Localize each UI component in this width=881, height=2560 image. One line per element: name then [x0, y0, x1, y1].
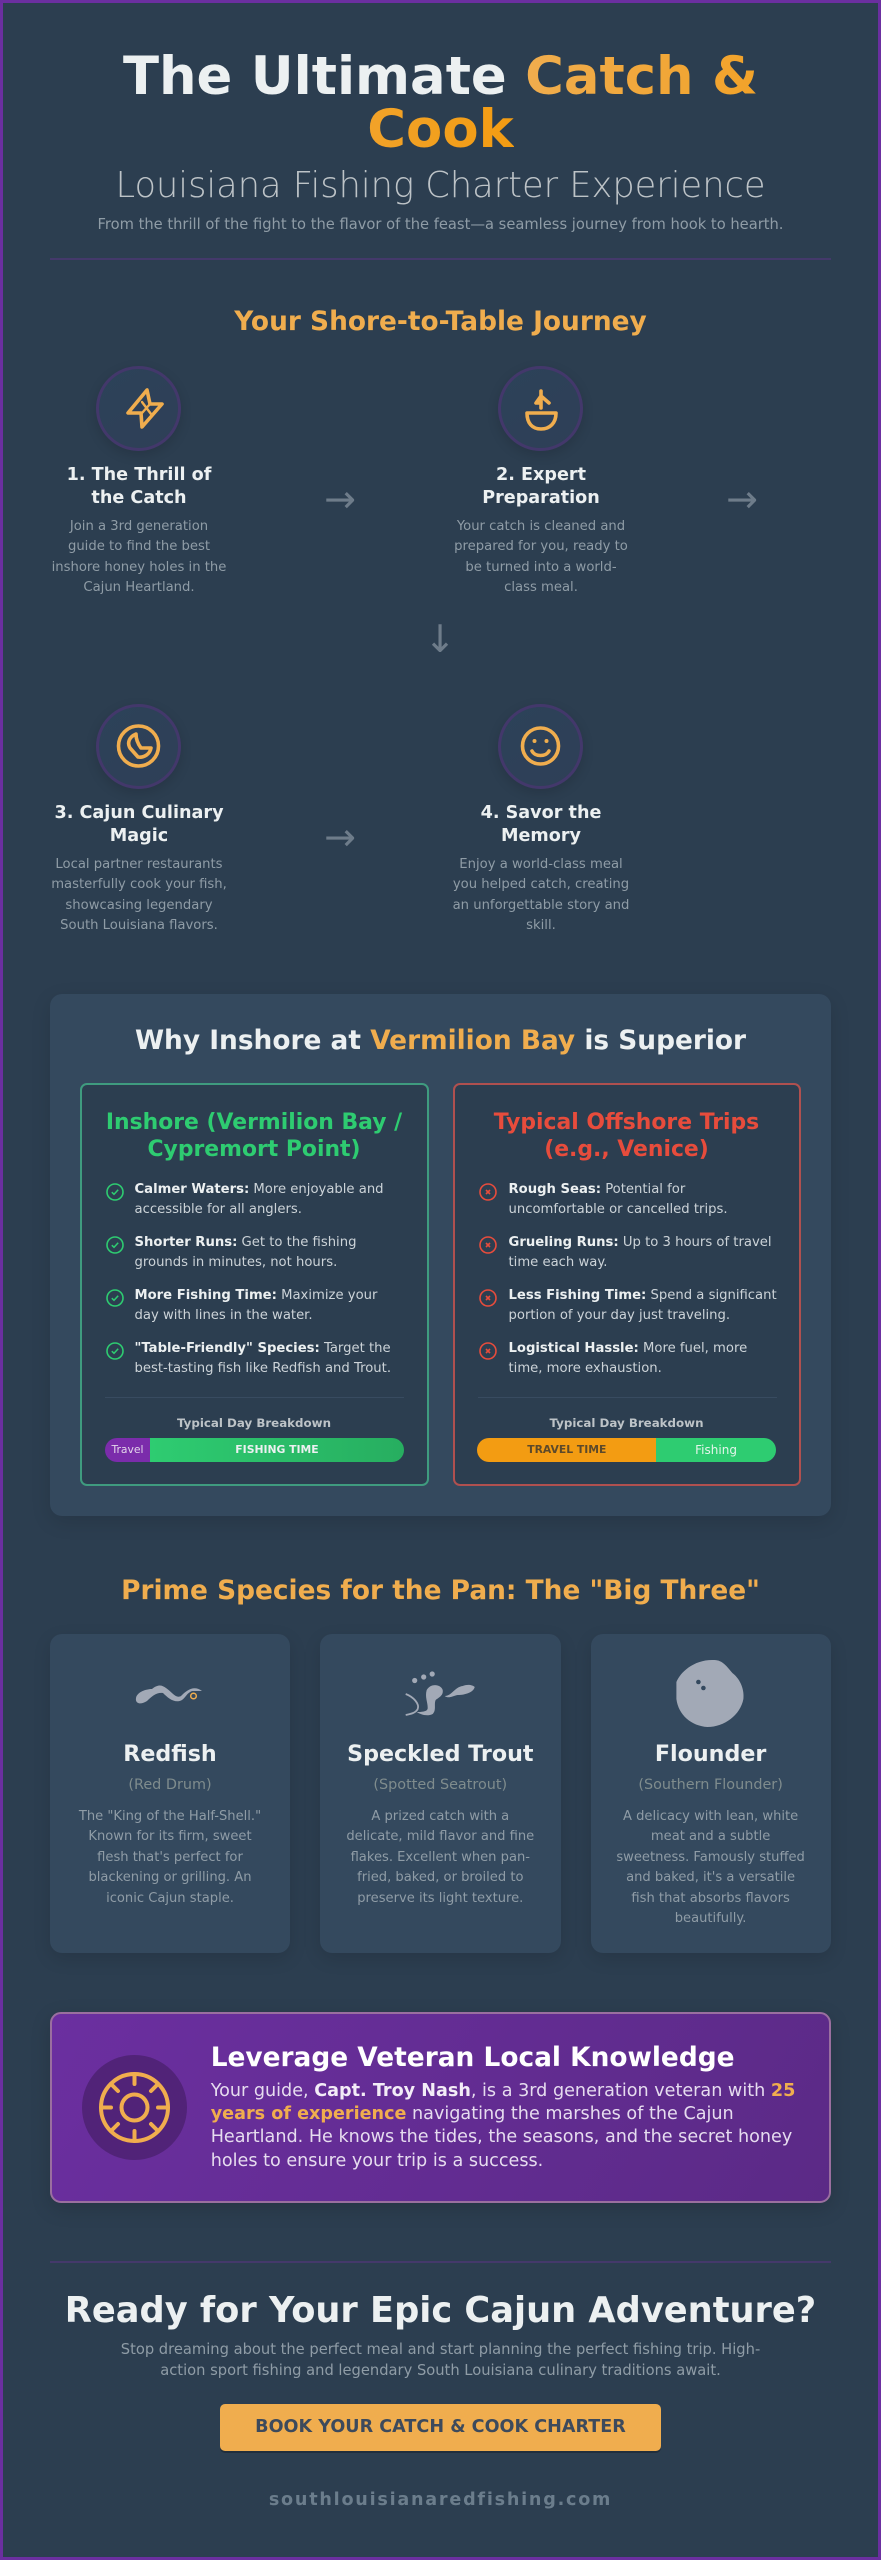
- cta text: [0, 2340, 881, 2381]
- website: southlouisianaredfishing.com: [269, 2490, 612, 2510]
- step title: Preparation: [482, 488, 600, 508]
- item: Shorter Runs: Get to the fishing: [134, 1235, 356, 1250]
- step title: Memory: [501, 826, 581, 846]
- item: [134, 1341, 391, 1376]
- offshore title: (e.g., Venice): [544, 1137, 709, 1162]
- species text: [591, 1807, 831, 1929]
- step title: [54, 803, 224, 846]
- step text: class meal.: [504, 580, 578, 595]
- bar: offshore day: [477, 1438, 776, 1462]
- callout: local knowledge: [50, 2012, 831, 2203]
- callout text: Heartland. He knows the tides, the seasons, and the secret honey: [211, 2127, 792, 2147]
- icon: plate: [96, 704, 181, 789]
- species text: [320, 1807, 560, 1909]
- cta heading: Ready for Your Epic Cajun Adventure?: [65, 2290, 816, 2331]
- step text: Local partner restaurants: [55, 857, 223, 872]
- step text: [52, 519, 226, 595]
- step 3: [51, 704, 227, 933]
- header: [98, 46, 783, 232]
- panel: inshore: [80, 1083, 428, 1486]
- icon: lightning bolt: [96, 366, 181, 451]
- panel: offshore: [452, 1083, 800, 1486]
- offshore title: Typical Offshore Trips: [494, 1110, 759, 1135]
- species text: A delicacy with lean, white: [623, 1809, 798, 1824]
- item: [134, 1288, 378, 1323]
- callout text: Your guide, Capt. Troy Nash, is a 3rd generation veteran with 25: [211, 2080, 795, 2100]
- travel segment: Travel: [111, 1443, 144, 1456]
- item: day with lines in the water.: [134, 1308, 313, 1323]
- step text: Enjoy a world-class meal: [459, 857, 623, 872]
- item: time, more exhaustion.: [508, 1361, 662, 1376]
- item: [134, 1182, 384, 1217]
- step text: South Louisiana flavors.: [60, 918, 218, 933]
- step title: [482, 465, 600, 508]
- arrow down: ↓: [424, 617, 456, 661]
- icon: smile: [498, 704, 583, 789]
- item: [508, 1341, 747, 1376]
- species text: blackening or grilling. An: [88, 1870, 252, 1885]
- species text: flesh that's perfect for: [97, 1850, 243, 1865]
- item: Calmer Waters: More enjoyable and: [134, 1182, 384, 1197]
- step text: inshore honey holes in the: [52, 560, 226, 575]
- call to action: [0, 2280, 881, 2520]
- icon: check: [106, 1289, 124, 1307]
- item: Rough Seas: Potential for: [508, 1182, 685, 1197]
- species alt name: (Red Drum): [128, 1777, 212, 1793]
- step text: Join a 3rd generation: [70, 519, 208, 534]
- travel segment: [477, 1438, 656, 1462]
- title: The Ultimate Catch &: [123, 46, 758, 107]
- item: "Table-Friendly" Species: Target the: [134, 1341, 391, 1356]
- species name: Speckled Trout: [347, 1741, 533, 1767]
- step title: 4. Savor the: [481, 803, 601, 823]
- step text: Cajun Heartland.: [83, 580, 195, 595]
- icon: cross: [479, 1342, 497, 1360]
- step title: [67, 465, 212, 508]
- step text: showcasing legendary: [65, 898, 213, 913]
- icon: flounder: [591, 1634, 831, 1734]
- item: accessible for all anglers.: [134, 1202, 302, 1217]
- species text: preserve its light texture.: [357, 1891, 523, 1906]
- callout text: holes to ensure your trip is a success.: [211, 2151, 543, 2171]
- item: portion of your day just traveling.: [508, 1308, 730, 1323]
- title: Cook: [367, 99, 514, 160]
- icon: cross: [479, 1289, 497, 1307]
- species alt name: (Spotted Seatrout): [373, 1777, 507, 1793]
- item: grounds in minutes, not hours.: [134, 1255, 337, 1270]
- breakdown label: Typical Day Breakdown: [177, 1416, 331, 1430]
- inshore title: Cypremort Point): [147, 1137, 361, 1162]
- card: trout: [320, 1634, 561, 1953]
- icon: bowl: [498, 366, 583, 451]
- fishing segment: [656, 1438, 776, 1462]
- step text: Your catch is cleaned and: [457, 519, 625, 534]
- step 2: [454, 366, 628, 595]
- item: uncomfortable or cancelled trips.: [508, 1202, 728, 1217]
- card: flounder: [591, 1634, 831, 1953]
- icon: redfish: [136, 1686, 202, 1704]
- species text: meat and a subtle: [651, 1829, 770, 1844]
- heading: why inshore: Why Inshore at Vermilion Bay is Superior: [135, 1025, 746, 1056]
- species text: fish that absorbs flavors: [631, 1891, 790, 1906]
- travel segment: [105, 1438, 150, 1462]
- step text: an unforgettable story and: [453, 898, 629, 913]
- species alt name: (Southern Flounder): [638, 1777, 783, 1793]
- arrow: →: [324, 815, 356, 859]
- bar: inshore day: [105, 1438, 404, 1462]
- arrow: →: [726, 477, 758, 521]
- step text: skill.: [526, 918, 556, 933]
- icon: cross: [479, 1183, 497, 1201]
- icon: check: [106, 1342, 124, 1360]
- step text: [453, 857, 629, 933]
- fishing segment: [150, 1438, 404, 1462]
- arrow: →: [324, 477, 356, 521]
- item: best-tasting fish like Redfish and Trout.: [134, 1361, 391, 1376]
- step text: be turned into a world-: [465, 560, 617, 575]
- icon: check: [106, 1183, 124, 1201]
- panel: comparison: [50, 994, 831, 1516]
- step text: [51, 857, 227, 933]
- step text: [454, 519, 628, 595]
- callout text: years of experience navigating the marshes of the Cajun: [211, 2104, 734, 2124]
- step title: 3. Cajun Culinary: [54, 803, 224, 823]
- drawback list: [479, 1182, 777, 1376]
- step title: 2. Expert: [496, 465, 586, 485]
- benefit list: [106, 1182, 391, 1376]
- step 1: [52, 366, 226, 595]
- species name: Flounder: [655, 1741, 766, 1767]
- cta text: action sport fishing and legendary South Louisiana culinary traditions await.: [160, 2362, 721, 2379]
- card: redfish: [50, 1634, 290, 1953]
- step text: you helped catch, creating: [453, 877, 629, 892]
- offshore title: [494, 1110, 759, 1162]
- species text: Known for its firm, sweet: [88, 1829, 252, 1844]
- item: [508, 1288, 777, 1323]
- travel segment: TRAVEL TIME: [527, 1443, 606, 1456]
- species text: sweetness. Famously stuffed: [616, 1850, 805, 1865]
- callout heading: Leverage Veteran Local Knowledge: [211, 2042, 735, 2073]
- icon: trout: [406, 1671, 475, 1716]
- item: [508, 1182, 728, 1217]
- item: [134, 1235, 356, 1270]
- icon: check: [106, 1236, 124, 1254]
- item: Less Fishing Time: Spend a significant: [508, 1288, 777, 1303]
- species name: Redfish: [123, 1741, 217, 1767]
- cta button: BOOK YOUR CATCH & COOK CHARTER: [255, 2417, 626, 2437]
- step text: guide to find the best: [68, 539, 210, 554]
- item: time each way.: [508, 1255, 607, 1270]
- species text: fried, baked, or broiled to: [357, 1870, 523, 1885]
- species text: delicate, mild flavor and fine: [346, 1829, 534, 1844]
- species text: and baked, it's a versatile: [626, 1870, 795, 1885]
- step title: Magic: [110, 826, 168, 846]
- step title: [481, 803, 601, 846]
- fishing segment: FISHING TIME: [235, 1443, 319, 1456]
- icon: cross: [479, 1236, 497, 1254]
- fishing segment: Fishing: [695, 1443, 737, 1457]
- breakdown label: Typical Day Breakdown: [550, 1416, 703, 1430]
- species text: [78, 1809, 261, 1906]
- step title: 1. The Thrill of: [67, 465, 211, 485]
- species text: beautifully.: [675, 1911, 746, 1926]
- item: Logistical Hassle: More fuel, more: [508, 1341, 747, 1356]
- species text: The "King of the Half-Shell.": [79, 1809, 261, 1824]
- step title: the Catch: [91, 488, 187, 508]
- item: [508, 1235, 772, 1270]
- step 4: [453, 704, 629, 933]
- cta text: Stop dreaming about the perfect meal and start planning the perfect fishing trip. High-: [121, 2341, 760, 2358]
- inshore title: Inshore (Vermilion Bay /: [106, 1110, 402, 1135]
- subtitle: Louisiana Fishing Charter Experience: [115, 165, 766, 206]
- step text: prepared for you, ready to: [454, 539, 628, 554]
- inshore title: [106, 1110, 402, 1162]
- tagline: From the thrill of the fight to the flavor of the feast—a seamless journey from hook to hearth.: [98, 216, 783, 232]
- species text: A prized catch with a: [371, 1809, 509, 1824]
- icon: ship wheel: [81, 2054, 188, 2161]
- heading: journey: Your Shore-to-Table Journey: [234, 306, 647, 337]
- title: [123, 46, 758, 160]
- species text: iconic Cajun staple.: [106, 1891, 234, 1906]
- item: More Fishing Time: Maximize your: [134, 1288, 377, 1303]
- callout text: [211, 2080, 795, 2173]
- heading: species: Prime Species for the Pan: The "Big Three": [121, 1574, 760, 1606]
- step text: masterfully cook your fish,: [51, 877, 227, 892]
- cta button: [220, 2404, 661, 2451]
- item: Grueling Runs: Up to 3 hours of travel: [508, 1235, 772, 1250]
- species text: flakes. Excellent when pan-: [351, 1850, 530, 1865]
